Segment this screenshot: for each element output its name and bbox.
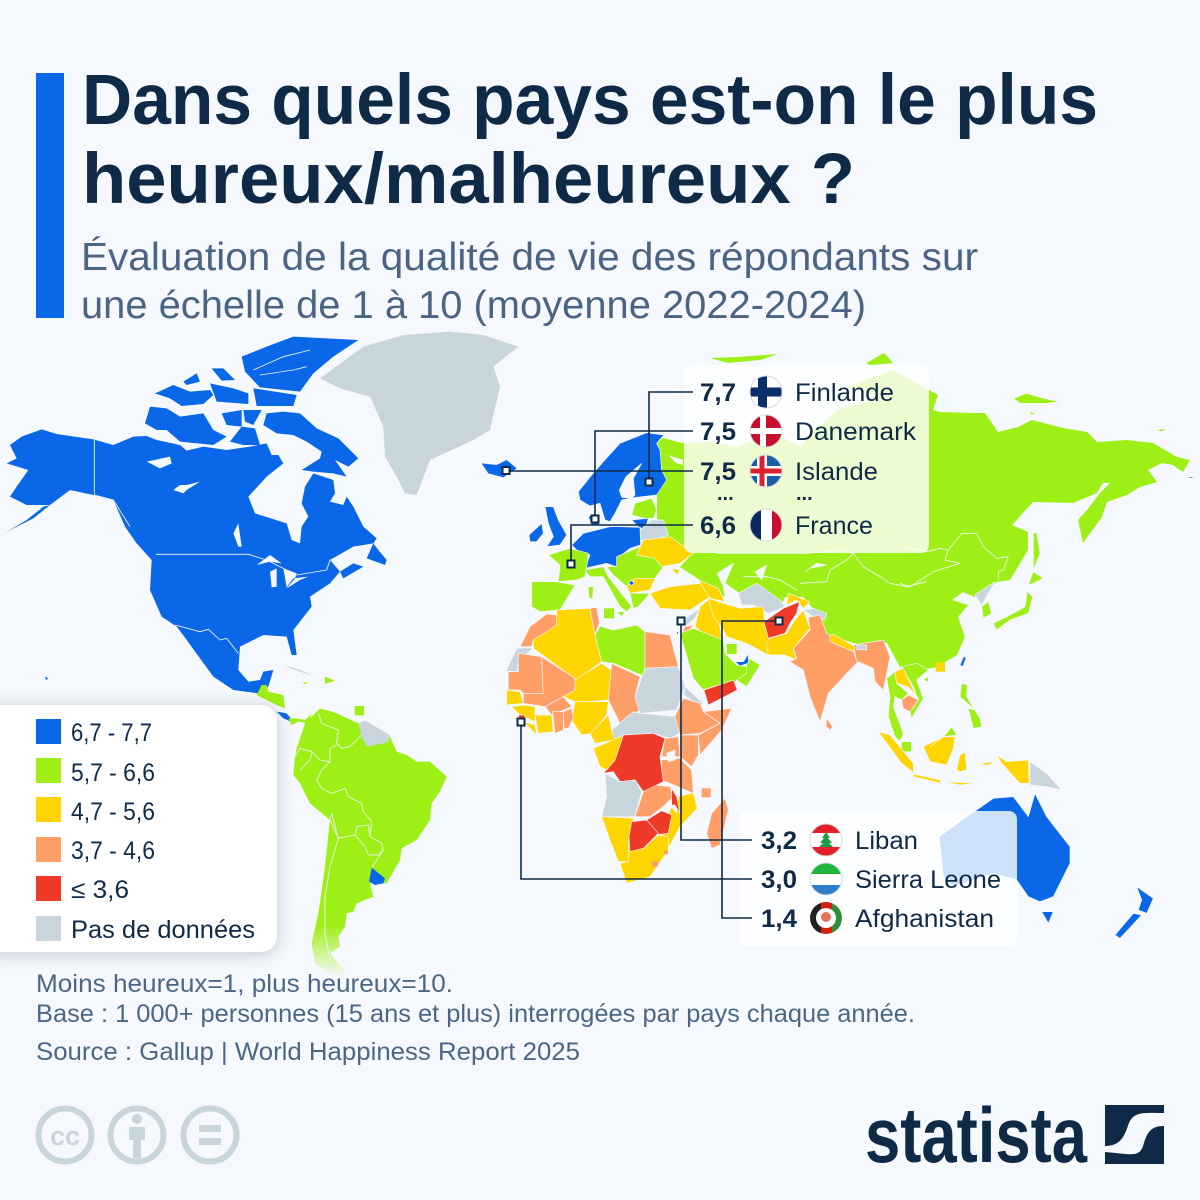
map: South-East Asia and Oceania [878,656,1153,938]
title [82,61,1098,219]
callout: unhappiest countries [762,811,1017,934]
map: South America [293,706,447,977]
row: Liban [761,824,918,856]
flag: Finland [750,376,782,408]
flag: France [750,509,782,541]
row: Afghanistan [761,902,994,934]
flag: Afghanistan [810,902,842,934]
row: Danemark: 7,5 [700,418,736,446]
legend item: 5,7 - 6,6: 5,7 - 6,6 [71,759,155,787]
legend item: 4,7 - 5,6 [36,797,155,826]
row: Liban: Liban [855,827,918,855]
row: Islande: 7,5 [700,458,736,486]
row: Sierra Leone [761,863,1001,895]
row: Sierra Leone: 3,0 [761,866,797,894]
row: France: France [795,512,873,540]
row: Liban: 3,2 [761,827,797,855]
map: Africa [506,607,732,883]
row: Islande: Islande [795,458,878,486]
flag: Lebanon [810,824,842,856]
legend item: 6,7 - 7,7 [36,719,152,747]
legend item: 5,7 - 6,6 [36,758,155,787]
map: North America [5,337,517,725]
footnote: Base : 1 000+ personnes (15 ans et plus) interrogées par pays chaque année. [36,1000,915,1028]
logo: statista icon [1105,1105,1164,1164]
row: France [700,509,873,541]
legend [0,705,277,952]
icon: no derivatives [184,1108,236,1162]
flag: Sierra Leone [810,863,842,895]
leader lines [502,392,782,918]
row: Afghanistan: 1,4 [761,905,797,933]
row: Danemark [700,415,917,447]
map: Greenland [320,332,518,495]
icon: creative commons: cc [50,1121,80,1151]
row: Afghanistan: Afghanistan [855,905,994,933]
legend item: 3,7 - 4,6: 3,7 - 4,6 [71,837,155,865]
legend item: 4,7 - 5,6: 4,7 - 5,6 [71,798,155,826]
title accent bar [36,73,64,318]
footnote [36,970,915,1028]
map: Russia, Central Asia and China [657,353,1190,670]
ellipsis: ... [717,483,734,505]
ellipsis [717,483,813,505]
title: Dans quels pays est-on le plus [82,61,1098,140]
row: Islande [700,455,878,487]
logo: statista wordmark: statista [865,1091,1087,1179]
legend item: 6,7 - 7,7: 6,7 - 7,7 [71,719,152,747]
map: Far East [900,393,1197,630]
icon: attribution [110,1108,164,1162]
footnote: Moins heureux=1, plus heureux=10. [36,970,453,998]
icon: creative commons [38,1108,92,1162]
legend item: 3,7 - 4,6 [36,837,155,865]
title: heureux/malheureux ? [82,140,855,219]
map: Europe [529,433,693,618]
row: France: 6,6 [700,512,736,540]
callout: happiest countries [684,365,929,553]
subtitle [81,236,978,327]
legend item: up to 3,6 [36,876,129,904]
row: Sierra Leone: Sierra Leone [855,866,1001,894]
legend item: up to 3,6: ≤ 3,6 [71,876,129,904]
row: Finlande [700,376,894,408]
row: Finlande: Finlande [795,379,894,407]
flag: Iceland [750,455,782,487]
legend item: no data: Pas de données [71,916,255,944]
row: Finlande: 7,7 [700,379,736,407]
subtitle: une échelle de 1 à 10 (moyenne 2022-2024) [81,284,866,327]
ellipsis: ... [796,483,813,505]
map: Middle East and South Asia [650,550,927,730]
flag: Denmark [750,415,782,447]
world map [5,332,1197,977]
footer map fade [250,925,480,977]
row: Danemark: Danemark [795,418,917,446]
subtitle: Évaluation de la qualité de vie des répondants sur [81,236,978,279]
source: Source : Gallup | World Happiness Report 2025 [36,1038,580,1066]
